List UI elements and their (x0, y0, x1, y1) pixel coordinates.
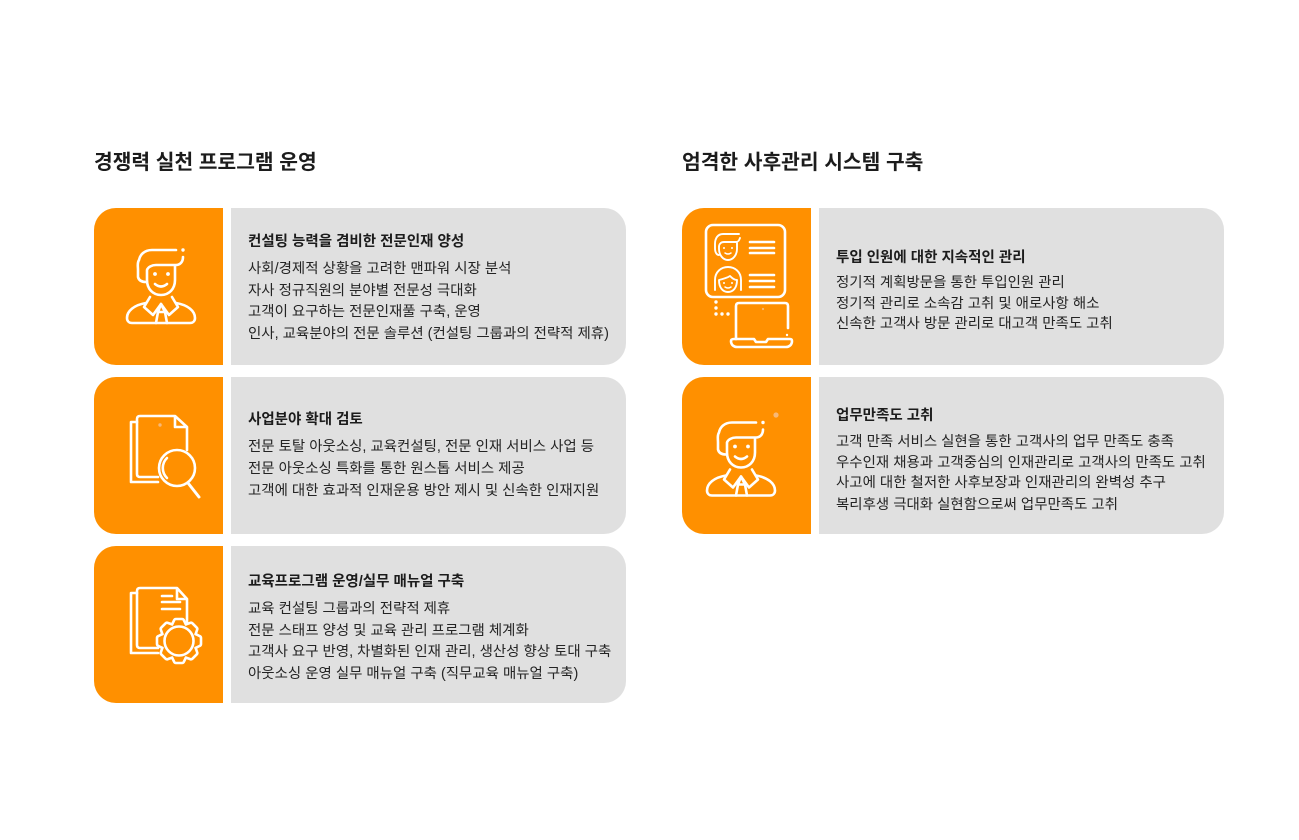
card: work satisfaction (819, 377, 1224, 534)
heading: left column: 경쟁력 실천 프로그램 운영 (94, 152, 317, 174)
card body: 정기적 관리로 소속감 고취 및 애로사항 해소 (836, 296, 1099, 312)
card title: 사업분야 확대 검토 (248, 412, 363, 428)
icon: person (126, 248, 196, 324)
icon: document with magnifier (130, 414, 201, 499)
card body (248, 260, 609, 342)
icon panel: staff management (682, 208, 811, 365)
card body: 정기적 계획방문을 통한 투입인원 관리 (836, 275, 1065, 291)
icon panel: document gear (94, 546, 223, 703)
card body: 교육 컨설팅 그룹과의 전략적 제휴 (248, 601, 450, 617)
card body: 사회/경제적 상황을 고려한 맨파워 시장 분석 (248, 261, 511, 277)
card body: 고객 만족 서비스 실현을 통한 고객사의 업무 만족도 충족 (836, 434, 1174, 450)
card body: 전문 스태프 양성 및 교육 관리 프로그램 체계화 (248, 623, 529, 639)
card body: 사고에 대한 철저한 사후보장과 인재관리의 완벽성 추구 (836, 475, 1166, 491)
icon panel: consulting person (94, 208, 223, 365)
card body: 전문 아웃소싱 특화를 통한 원스톱 서비스 제공 (248, 461, 525, 477)
card: staff management (819, 208, 1224, 365)
card body (836, 274, 1113, 332)
card body: 아웃소싱 운영 실무 매뉴얼 구축 (직무교육 매뉴얼 구축) (248, 666, 578, 682)
card body (248, 439, 599, 499)
card body (248, 601, 611, 682)
icon: profile board and laptop (704, 224, 794, 348)
card title: 교육프로그램 운영/실무 매뉴얼 구축 (248, 574, 464, 590)
card body: 고객이 요구하는 전문인재풀 구축, 운영 (248, 304, 481, 320)
card body: 신속한 고객사 방문 관리로 대고객 만족도 고취 (836, 316, 1113, 332)
card body: 고객에 대한 효과적 인재운용 방안 제시 및 신속한 인재지원 (248, 483, 599, 499)
card body: 자사 정규직원의 분야별 전문성 극대화 (248, 283, 477, 299)
card body: 복리후생 극대화 실현함으로써 업무만족도 고취 (836, 497, 1118, 513)
card: training program (231, 546, 626, 703)
card: consulting capability (231, 208, 626, 365)
card body: 전문 토탈 아웃소싱, 교육컨설팅, 전문 인재 서비스 사업 등 (248, 439, 594, 455)
heading: right column: 엄격한 사후관리 시스템 구축 (682, 152, 923, 174)
card title: 업무만족도 고취 (836, 408, 933, 424)
icon: document with gear (130, 586, 202, 664)
icon panel: work satisfaction (682, 377, 811, 534)
card body: 고객사 요구 반영, 차별화된 인재 관리, 생산성 향상 토대 구축 (248, 644, 611, 660)
icon: person (706, 412, 779, 497)
card body: 인사, 교육분야의 전문 솔루션 (컨설팅 그룹과의 전략적 제휴) (248, 326, 609, 342)
icon panel: document search (94, 377, 223, 534)
card body: 우수인재 채용과 고객중심의 인재관리로 고객사의 만족도 고취 (836, 455, 1206, 471)
card title: 투입 인원에 대한 지속적인 관리 (836, 250, 1026, 266)
card: business expansion review (231, 377, 626, 534)
card title: 컨설팅 능력을 겸비한 전문인재 양성 (248, 234, 464, 250)
card body (836, 434, 1206, 513)
